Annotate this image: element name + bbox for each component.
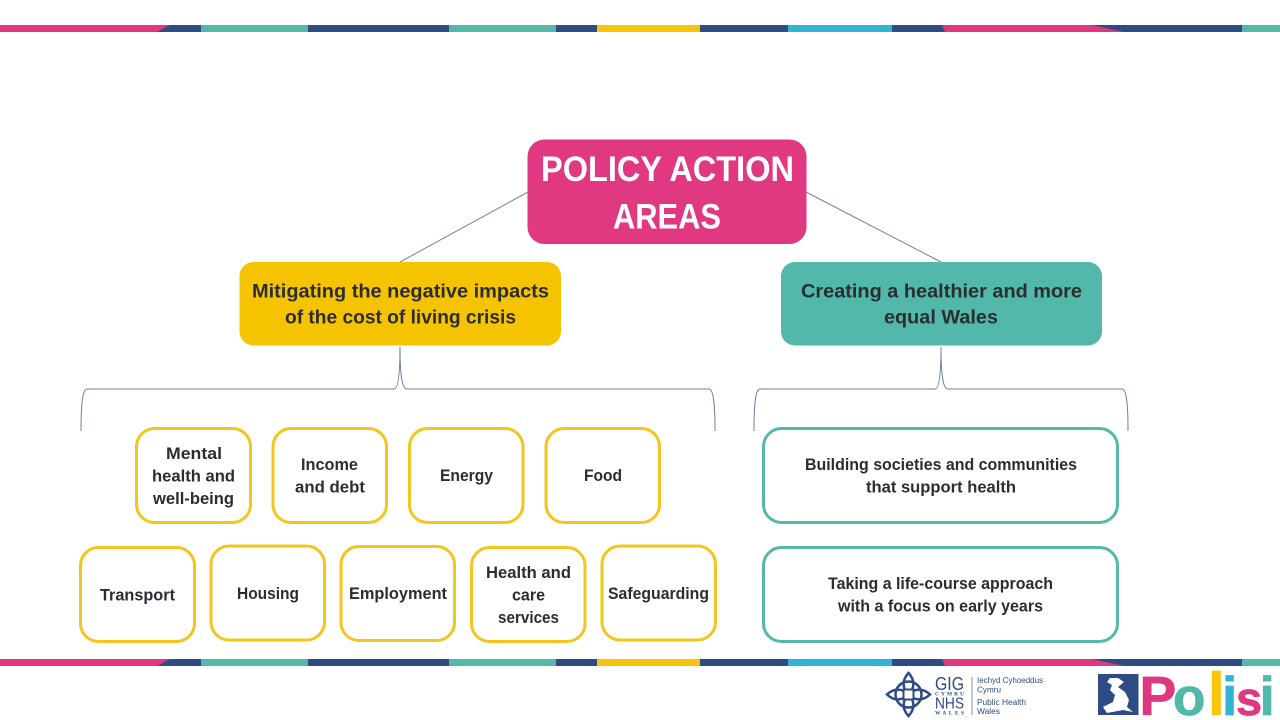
box: energy [410,428,523,522]
logo: GIG Cymru NHS Wales wordmark: Wales [977,707,1000,716]
logo: GIG Cymru NHS Wales wordmark: GIG [935,674,964,694]
box: transport [80,548,194,642]
connector: title to right heading [806,192,941,262]
title box [528,140,806,244]
logo: GIG Cymru NHS Wales wordmark: Public Health [977,698,1026,707]
box: building societies and communities: Building societies and communities [805,456,1077,474]
box: life-course approach [764,548,1118,642]
box: income and debt [273,428,386,522]
heading: creating a healthier Wales: equal Wales [884,308,998,328]
box: health and care services: services [498,609,559,627]
box: income and debt: Income [301,456,358,474]
box: mental health and well-being: health and [152,468,235,486]
box: building societies and communities [764,428,1118,522]
logo: GIG Cymru NHS Wales wordmark [935,674,1043,716]
box: employment: Employment [349,585,447,603]
bottom colour stripe [0,659,1280,666]
box: income and debt: and debt [295,478,366,496]
logo: GIG Cymru NHS Wales wordmark: Cymru [977,686,1001,694]
top colour stripe [0,25,1280,32]
heading: creating a healthier Wales [781,262,1102,346]
title box: POLICY ACTION [541,150,794,189]
heading: mitigating the cost of living crisis: of the cost of living crisis [285,308,516,328]
box: energy: Energy [440,467,494,485]
heading: mitigating the cost of living crisis: Mitigating the negative impacts [252,282,549,302]
box: life-course approach: with a focus on early years [837,598,1043,616]
connector: title to left heading [400,192,528,262]
box: health and care services: Health and [486,564,571,582]
box: life-course approach: Taking a life-course approach [828,575,1053,593]
right brace [754,347,1128,431]
title box: AREAS [613,198,721,236]
box: transport: Transport [100,586,175,604]
heading: mitigating the cost of living crisis [240,262,561,346]
box: mental health and well-being [136,428,250,522]
box: building societies and communities: that support health [866,478,1016,496]
box: safeguarding: Safeguarding [608,585,709,603]
heading: creating a healthier Wales: Creating a healthier and more [801,282,1082,302]
box: mental health and well-being: well-being [152,490,234,508]
box: food [546,428,660,522]
box: mental health and well-being: Mental [166,445,222,463]
logo: GIG Cymru NHS Wales wordmark: NHS [935,696,964,712]
box: food: Food [584,467,622,485]
box: housing: Housing [237,585,299,603]
box: health and care services: care [512,586,545,604]
left brace [81,347,715,431]
box: housing [211,546,324,640]
box: employment [341,546,454,640]
box: safeguarding [602,546,716,640]
logo: GIG Cymru NHS Wales wordmark: CYMRU [935,692,964,698]
logo: GIG Cymru NHS Wales wordmark: Iechyd Cyhoeddus [977,676,1043,685]
logo: GIG Cymru NHS Wales wordmark: WALES [935,710,964,716]
logo: NHS Wales knot icon [887,673,930,716]
box: health and care services [472,548,585,642]
logo: Polisi Wales map square [1098,674,1138,715]
